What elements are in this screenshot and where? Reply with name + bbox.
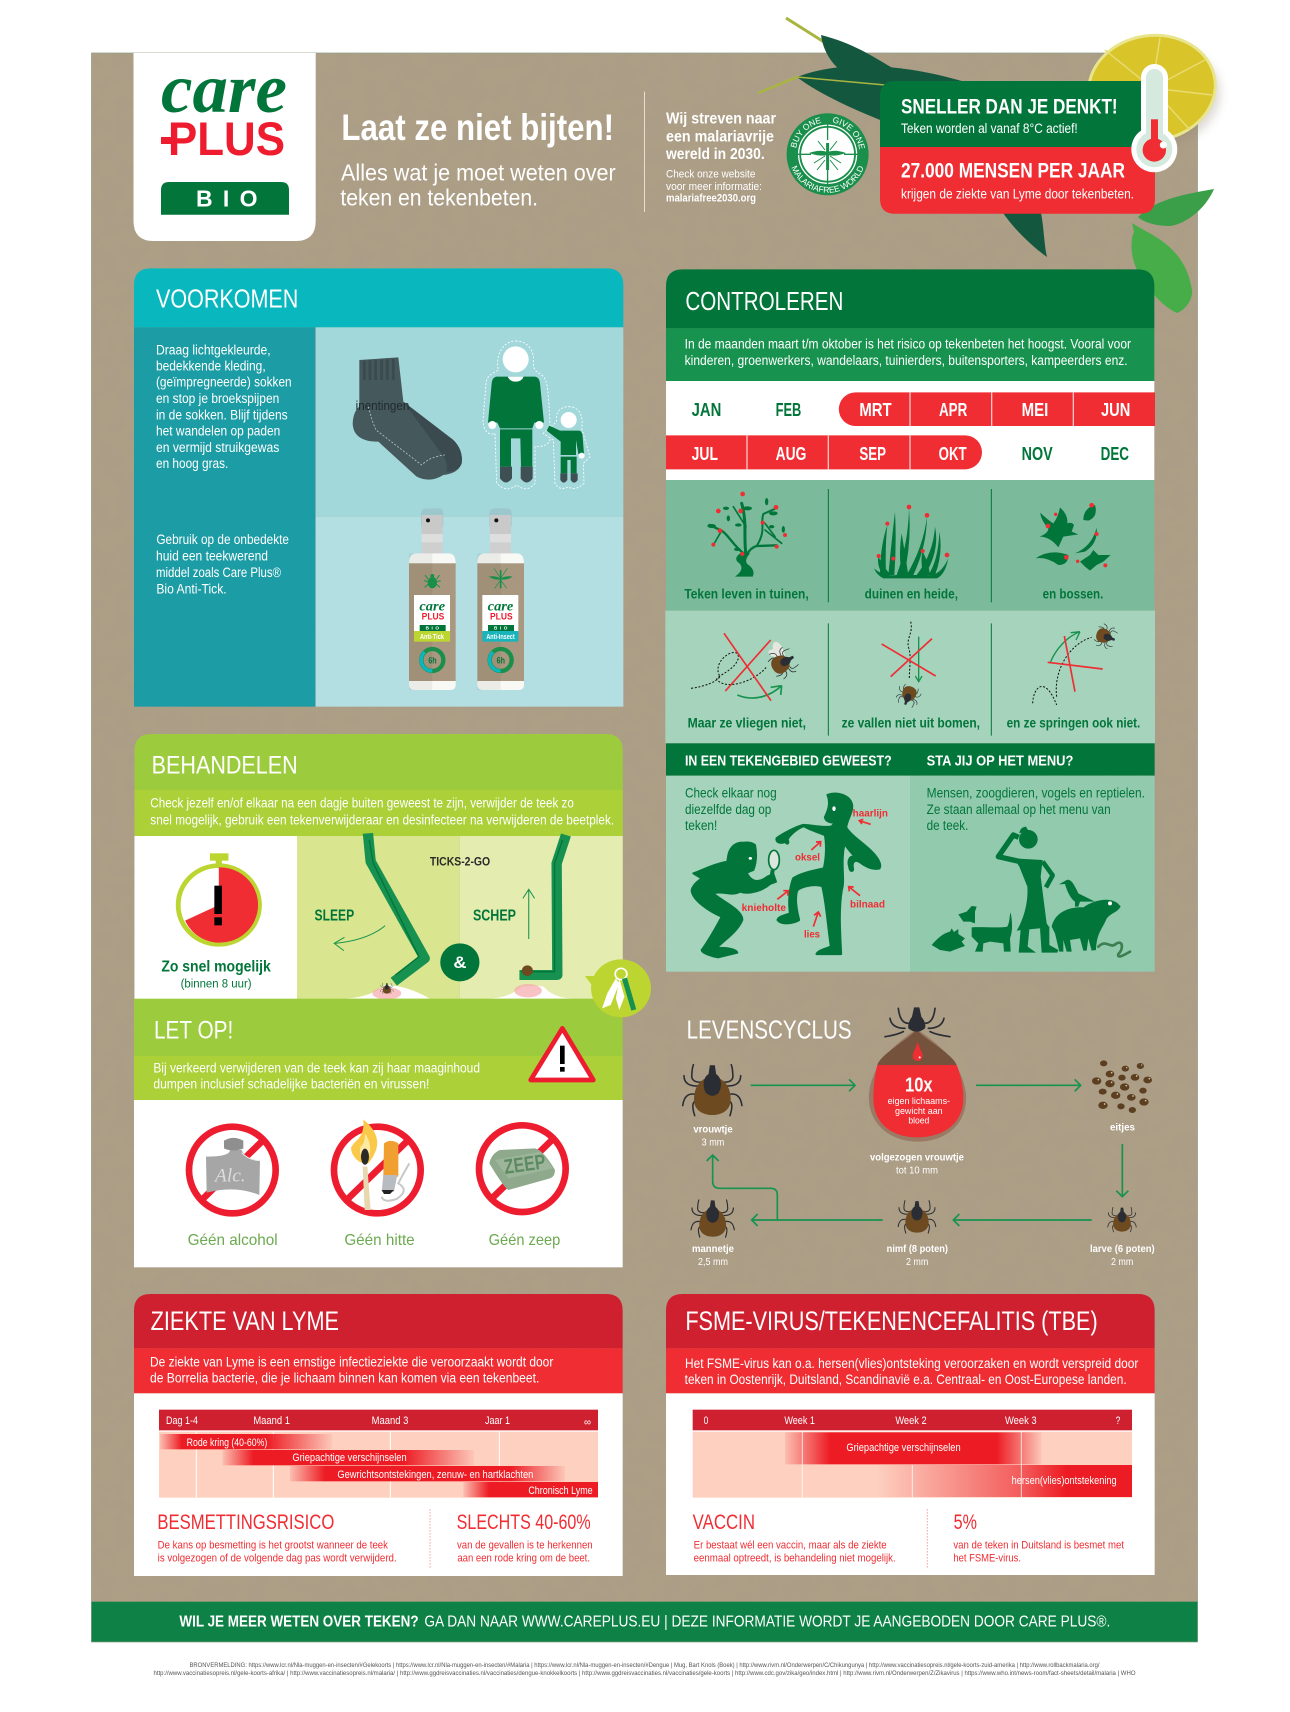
illustration: woman with magnifying glass (692, 842, 779, 957)
chart: fsme timeline: Week 3 (1005, 1415, 1037, 1427)
stat: besmettingsrisico: BESMETTINGSRISICO (157, 1510, 334, 1534)
chart: lyme timeline: Maand 3 (372, 1415, 408, 1427)
chart: lyme timeline: ∞ (584, 1416, 591, 1428)
chart: fsme timeline: hersen(vlies)ontstekening (1012, 1475, 1117, 1487)
label: nimf: nimf (8 poten) (887, 1244, 948, 1255)
text block: clothing advice: en vermijd struikgewas (156, 440, 279, 455)
label: eitjes: eitjes (1110, 1123, 1135, 1134)
panel: voorkomen (134, 268, 623, 707)
labels: no alcohol, heat, soap: Géén alcohol (188, 1232, 278, 1249)
stat: vaccin: eenmaal optreedt, is behandeling niet mogelijk. (694, 1552, 896, 1564)
text block: warning (153, 1061, 480, 1092)
text block: fsme intro: teken in Oostenrijk, Duitsland, Scandinavië e.a. Centraal- en Oost-Europese landen. (685, 1372, 1127, 1387)
text block: clothing advice: en hoog gras. (156, 456, 228, 471)
text block: on the menu: Mensen, zoogdieren, vogels en reptielen. (927, 786, 1145, 801)
illustration: bird and sheep (1052, 880, 1121, 952)
captions row one (684, 586, 1103, 602)
text block: warning: Bij verkeerd verwijderen van de teek kan zij haar maaginhoud (153, 1061, 480, 1076)
icon: adult and child in covering clothes (483, 341, 590, 489)
chart: fsme timeline: ? (1116, 1415, 1120, 1427)
icon: ampersand circle (440, 943, 480, 981)
badge: malariafree world (786, 113, 869, 196)
captions row one: Teken leven in tuinen, (684, 586, 809, 602)
illustration: person scratching head (998, 827, 1058, 953)
logo wordmark plus: PLUS (168, 112, 285, 165)
text block: clothing advice (156, 342, 292, 471)
calendar: months (666, 392, 1155, 469)
text block: risk months: kinderen, groenwerkers, wandelaars, tuinierders, buitensporters, kampeerders enz. (685, 353, 1128, 368)
stat: 5 procent: het FSME-virus. (953, 1552, 1021, 1564)
calendar: months: SEP (859, 443, 886, 464)
icon: no alcohol: Alc. (213, 1166, 246, 1187)
panel: ziekte van lyme (134, 1294, 623, 1576)
callout: sneller dan je denkt: SNELLER DAN JE DENKT! (901, 95, 1118, 119)
stat: slechts 40-60 procent: aan een rode kring om de beet. (457, 1552, 590, 1564)
labels: no alcohol, heat, soap: Géén zeep (489, 1232, 560, 1249)
label: larve (1090, 1244, 1155, 1268)
label: ticks-2-go: TICKS-2-GO (430, 855, 490, 869)
label: mannetje: mannetje (692, 1244, 735, 1255)
icon: bottle anti-tick (409, 508, 456, 690)
text block: clothing advice: bedekkende kleding, (156, 358, 266, 373)
text block: fsme intro (685, 1356, 1139, 1387)
text block: clothing advice: het wandelen op paden (156, 423, 280, 438)
calendar: months: JUN (1101, 399, 1130, 420)
text block: lyme intro: De ziekte van Lyme is een ernstige infectieziekte die veroorzaakt wordt door (150, 1355, 554, 1370)
icon: no alcohol (189, 1127, 276, 1213)
stat: besmettingsrisico (157, 1510, 397, 1564)
text block: repellent advice (156, 532, 289, 596)
callout: sneller dan je denkt (880, 81, 1155, 214)
text block: repellent advice: huid een teekwerend (156, 548, 268, 563)
text block: clothing advice: (geïmpregneerde) sokken (156, 375, 292, 390)
text block: check each other: teken! (685, 818, 717, 833)
stat: besmettingsrisico: is volgezogen of de volgende dag pas wordt verwijderd. (158, 1552, 397, 1564)
captions row two: Maar ze vliegen niet, (688, 715, 806, 731)
icon: bottle anti-insect: care (488, 599, 513, 614)
body part labels with arrows: haarlijn (853, 809, 888, 820)
subheading: sta jij op het menu: STA JIJ OP HET MENU? (927, 754, 1073, 770)
stat: slechts 40-60 procent (457, 1510, 593, 1564)
calendar: months: MRT (859, 399, 892, 420)
captions row two: ze vallen niet uit bomen, (842, 715, 980, 731)
badge: malariafree world: GIVE ONE (833, 117, 865, 150)
stat: 5 procent (953, 1510, 1124, 1564)
calendar: months: AUG (776, 443, 806, 464)
chart: fsme timeline (693, 1410, 1132, 1498)
callout: sneller dan je denkt: krijgen de ziekte van Lyme door tekenbeten. (901, 187, 1134, 202)
malaria statement: Check onze website (666, 168, 755, 180)
text block: check each other: Check elkaar nog (685, 786, 777, 801)
label: volgezogen vrouwtje: volgezogen vrouwtje (870, 1153, 965, 1164)
heading: levenscyclus: LEVENSCYCLUS (687, 1014, 852, 1044)
label: nimf (887, 1244, 948, 1268)
text block: treatment advice (150, 795, 614, 828)
stat: slechts 40-60 procent: van de gevallen is te herkennen (457, 1539, 593, 1551)
text block: risk months (685, 336, 1131, 368)
panel: controleren (665, 269, 1155, 743)
footer band: GA DAN NAAR WWW.CAREPLUS.EU | DEZE INFORMATIE WORDT JE AANGEBODEN DOOR CARE PLUS®. (424, 1614, 1110, 1631)
chart: fsme timeline: 0 (704, 1415, 708, 1427)
text block: on the menu: Ze staan allemaal op het menu van (927, 802, 1111, 817)
text block: warning: dumpen inclusief schadelijke bacteriën en virussen! (153, 1077, 429, 1092)
label: nimf: 2 mm (906, 1257, 928, 1268)
text block: clothing advice: Draag lichtgekleurde, (156, 342, 271, 357)
label: volgezogen vrouwtje: tot 10 mm (896, 1165, 938, 1176)
callout: sneller dan je denkt: 27.000 MENSEN PER JAAR (901, 159, 1125, 183)
chart: lyme timeline: Chronisch Lyme (528, 1485, 593, 1497)
label: mannetje (692, 1244, 735, 1268)
calendar: months: FEB (776, 399, 801, 420)
label: as soon as possible: Zo snel mogelijk (161, 958, 272, 976)
chart: lyme timeline: Gewrichtsontstekingen, zenuw- en hartklachten (337, 1469, 533, 1481)
source references (154, 1662, 1136, 1677)
captions row two: en ze springen ook niet. (1007, 715, 1140, 731)
malaria statement: Wij streven naar (666, 110, 776, 127)
chart: lyme timeline: Maand 1 (253, 1415, 290, 1427)
heading: behandelen: BEHANDELEN (152, 752, 298, 779)
background: kraft paper panel (92, 53, 1198, 1642)
icon: ampersand circle: & (453, 953, 466, 972)
illustration: man being checked (777, 794, 880, 954)
icon: bottle anti-tick: BIO (426, 626, 439, 631)
text block: risk months: In de maanden maart t/m oktober is het risico op tekenbeten het hoogst. Vooral voor (685, 336, 1131, 351)
icon: bottle anti-tick: Anti-Tick (420, 634, 444, 641)
stat: vaccin (693, 1510, 896, 1564)
panel: fsme-virus (666, 1294, 1155, 1575)
icon: no heat (334, 1119, 421, 1213)
icon: bottle anti-insect: 6h (497, 655, 505, 665)
bio badge (161, 182, 289, 215)
illustration: dog and hedgehog (932, 906, 1012, 952)
body part labels with arrows: bilnaad (850, 899, 885, 910)
calendar: months: OKT (939, 443, 967, 464)
body part labels with arrows: oksel (795, 853, 820, 864)
logo card (134, 51, 316, 241)
text block: repellent advice: Bio Anti-Tick. (156, 581, 227, 596)
icon: bottle anti-insect: BIO (494, 626, 508, 631)
footer band: WIL JE MEER WETEN OVER TEKEN? (179, 1614, 419, 1631)
source references: http://www.vaccinatiesopreis.nl/gele-koorts-afrika/ | http://www.vaccinatiesopreis.nl/malaria/ | http://www.ggdreisvaccinaties.nl/vaccinaties/dengue-knokkelkoorts | http://www.ggdreisvaccinaties.nl/vaccinaties/gele-koorts | http://www.cdc.gov/zika/geo/index.html | http://www.rivm.nl/Onderwerpen/Z/Zikavirus | https://www.who.int/news-room/fact-sheets/detail/malaria | WHO (154, 1670, 1136, 1677)
stat: vaccin: Er bestaat wél een vaccin, maar als de ziekte (694, 1539, 887, 1551)
heading: fsme-virus: FSME-VIRUS/TEKENENCEFALITIS (TBE) (685, 1306, 1098, 1336)
body part labels with arrows: knieholte (742, 903, 787, 914)
heading: controleren: CONTROLEREN (685, 286, 843, 316)
icon: female tick (683, 1065, 742, 1116)
text block: treatment advice: Check jezelf en/of elkaar na een dagje buiten geweest te zijn, verwijder de teek zo (150, 795, 574, 811)
icon: sock (353, 357, 462, 480)
malaria statement: malariafree2030.org (666, 193, 756, 205)
icon: bottle anti-insect: PLUS (490, 611, 513, 621)
body part labels with arrows: lies (804, 929, 820, 940)
captions row one: en bossen. (1043, 586, 1103, 602)
callout: sneller dan je denkt: Teken worden al vanaf 8°C actief! (901, 121, 1078, 136)
body part labels with arrows (742, 809, 888, 940)
decorative leaves and lemon (758, 18, 1226, 313)
chart: lyme timeline: Jaar 1 (485, 1415, 510, 1427)
calendar: months: JAN (692, 399, 721, 420)
panel: tick check and menu (666, 743, 1155, 972)
subheading: in een tekengebied geweest: IN EEN TEKENGEBIED GEWEEST? (685, 754, 892, 770)
text block: clothing advice: in de sokken. Blijf tijdens (156, 407, 288, 422)
bio badge: BIO (196, 186, 258, 212)
malaria statement: wereld in 2030. (665, 146, 765, 163)
chart: fsme timeline: Week 2 (895, 1415, 927, 1427)
malaria statement: een malariavrije (666, 128, 774, 145)
icon: bottle anti-tick: care (419, 599, 445, 614)
text block: treatment advice: snel mogelijk, gebruik een tekenverwijderaar en desinfecteer na verwijderen de beetplek. (150, 812, 614, 828)
illustration: scoop method: SCHEP (473, 908, 516, 925)
label: mannetje: 2,5 mm (698, 1257, 728, 1268)
chart: lyme timeline: Griepachtige verschijnselen (292, 1452, 407, 1464)
icon: ticks do not jump (1033, 622, 1119, 705)
icon: sock: inentingen (356, 398, 409, 413)
captions row two (688, 715, 1140, 731)
text block: check each other: diezelfde dag op (685, 802, 772, 817)
chart: fsme timeline: Griepachtige verschijnselen (846, 1442, 961, 1454)
labels: no alcohol, heat, soap: Géén hitte (344, 1232, 415, 1249)
illustration: sleep method (315, 833, 430, 999)
chart: lyme timeline: Dag 1-4 (166, 1415, 198, 1427)
stat: 5 procent: 5% (954, 1510, 977, 1534)
source references: BRONVERMELDING: https://www.lcr.nl/Nla-muggen-en-insecten/#Gelekoorts | https://www.lcr.nl/Nla-muggen-en-insecten/#Malaria | https://www.lcr.nl/Nla-muggen-en-insecten/#Dengue | Mug, Bart Knols (Boek) | http://www.rivm.nl/Onderwerpen/C/Chikungunya | http://www.vaccinatiesopreis.nl/gele-koorts-zuid-amerika | http://www.rollbackmalaria.org/ (190, 1662, 1100, 1669)
icon: engorged tick (869, 1007, 966, 1142)
malaria statement: voor meer informatie: (666, 181, 762, 193)
icon: engorged tick: 10x (905, 1075, 933, 1097)
icon: engorged tick: bloed (908, 1115, 929, 1125)
label: vrouwtje (693, 1125, 733, 1149)
icon: larva (1108, 1207, 1136, 1232)
icon: stopwatch (178, 853, 259, 944)
illustration: snake (1098, 943, 1130, 956)
section: levenscyclus (683, 1007, 1155, 1268)
icon: male tick (691, 1200, 734, 1237)
label: vrouwtje: 3 mm (702, 1138, 724, 1149)
stat: slechts 40-60 procent: SLECHTS 40-60% (457, 1510, 591, 1534)
illustration: sleep method: SLEEP (315, 908, 354, 925)
label: as soon as possible: (binnen 8 uur) (181, 977, 252, 991)
icon: bottle anti-insect (477, 508, 524, 690)
icon: thermometer (1131, 64, 1177, 172)
stat: vaccin: VACCIN (693, 1510, 755, 1534)
calendar: months: DEC (1101, 443, 1129, 464)
chart: fsme timeline: Week 1 (784, 1415, 815, 1427)
icon: forest leaves with ticks (1036, 503, 1111, 571)
icon: bottle anti-insect: Anti-Insect (486, 634, 515, 641)
illustration: scoop method (473, 835, 575, 999)
text block: clothing advice: en stop je broekspijpen (156, 391, 279, 406)
text block: check each other (685, 786, 777, 833)
labels: no alcohol, heat, soap (188, 1232, 560, 1249)
subtitle: teken en tekenbeten. (340, 184, 538, 210)
panel: behandelen (134, 734, 623, 999)
icon: ticks do not fall (882, 622, 936, 709)
icon: engorged tick: eigen lichaams- (888, 1096, 950, 1106)
heading: voorkomen: VOORKOMEN (156, 284, 298, 314)
calendar: months: JUL (692, 443, 718, 464)
icon: grass with ticks (874, 505, 949, 578)
label: volgezogen vrouwtje (870, 1153, 965, 1176)
panel: let op (134, 999, 623, 1267)
label: vrouwtje: vrouwtje (693, 1125, 733, 1136)
label: larve: larve (6 poten) (1090, 1244, 1155, 1255)
text block: on the menu: de teek. (927, 818, 968, 833)
icon: warning triangle (531, 1028, 593, 1080)
icon: no soap: ZEEP (502, 1150, 547, 1179)
icon: no soap (479, 1125, 566, 1212)
stat: 5 procent: van de teken in Duitsland is besmet met (953, 1539, 1124, 1551)
arrows: cycle (707, 1079, 1128, 1226)
calendar: months: MEI (1022, 399, 1048, 420)
text block: fsme intro: Het FSME-virus kan o.a. hersen(vlies)ontsteking veroorzaken en wordt verspreid door (685, 1356, 1139, 1371)
icon: engorged tick: gewicht aan (895, 1106, 943, 1116)
calendar: months: APR (939, 399, 968, 420)
badge: malariafree world: MALARIAFREE WORLD (792, 166, 863, 193)
footer band (92, 1602, 1198, 1642)
badge: malariafree world: BUY ONE (790, 117, 822, 148)
icon: keychain tool callout (585, 959, 651, 1017)
heading: let op: LET OP! (154, 1016, 233, 1044)
malaria statement (665, 110, 776, 205)
text block: repellent advice: middel zoals Care Plus® (156, 565, 281, 580)
icon: nymph (898, 1201, 936, 1233)
icon: bottle anti-tick: PLUS (422, 611, 444, 621)
text block: lyme intro: de Borrelia bacterie, die je lichaam binnen kan komen via een tekenbeet. (150, 1371, 539, 1386)
icon: tree with ticks (707, 492, 787, 577)
heading: ziekte van lyme: ZIEKTE VAN LYME (151, 1306, 339, 1336)
subtitle: Alles wat je moet weten over (341, 159, 616, 185)
icon: bottle anti-tick: 6h (428, 655, 437, 665)
calendar: months: NOV (1022, 443, 1053, 464)
chart: lyme timeline: Rode kring (40-60%) (187, 1437, 267, 1449)
label: larve: 2 mm (1111, 1257, 1133, 1268)
captions row one: duinen en heide, (865, 586, 958, 602)
label: as soon as possible (161, 958, 272, 991)
logo wordmark care: care (161, 51, 287, 128)
title: Laat ze niet bijten! (341, 107, 614, 148)
text block: repellent advice: Gebruik op de onbedekte (156, 532, 289, 547)
text block: on the menu (927, 786, 1145, 833)
icon: ticks do not fly (691, 633, 801, 701)
subtitle (340, 159, 616, 210)
icon: eggs (1092, 1060, 1152, 1113)
text block: lyme intro (150, 1355, 554, 1386)
chart: lyme timeline (159, 1410, 598, 1498)
stat: besmettingsrisico: De kans op besmetting is het grootst wanneer de teek (158, 1539, 389, 1551)
